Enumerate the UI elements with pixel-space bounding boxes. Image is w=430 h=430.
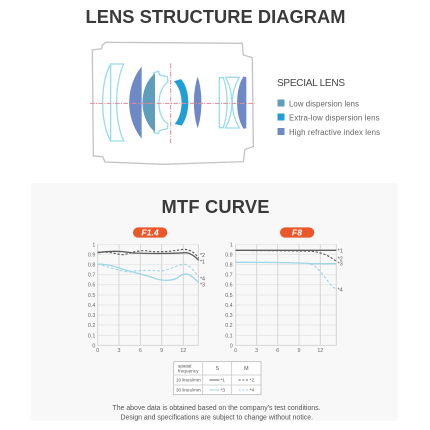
x axis labels: 0	[96, 348, 99, 354]
chart: F1.4	[88, 227, 205, 354]
y axis labels: 1	[92, 242, 95, 248]
curve labels: *3	[338, 262, 343, 268]
curve 1	[236, 248, 336, 252]
legend item: high refractive index: High refractive index lens	[289, 128, 380, 137]
x axis labels: 3	[255, 348, 258, 354]
footnote: Design and specifications are subject to change without notice.	[120, 414, 313, 422]
curve labels: *1	[200, 260, 205, 266]
y axis labels: 0.9	[88, 252, 95, 258]
y axis labels: 0.2	[88, 323, 95, 329]
optical axis	[90, 63, 255, 143]
lens diagram	[90, 42, 255, 164]
y axis labels: 0.6	[88, 283, 95, 289]
x axis labels	[234, 348, 323, 354]
table header: M	[244, 366, 249, 372]
x axis labels: 0	[234, 348, 237, 354]
y axis labels	[88, 242, 95, 349]
curve labels	[200, 253, 205, 288]
legend: special lens	[277, 78, 380, 137]
y axis labels: 0.3	[225, 313, 233, 319]
table row: 30 lines/mm: 30 lines/mm	[176, 388, 201, 393]
x axis labels: 6	[139, 348, 142, 354]
y axis labels: 0.3	[88, 313, 95, 319]
grid	[98, 244, 198, 335]
y axis labels: 0.2	[225, 323, 233, 329]
rear lens group	[219, 77, 239, 128]
table header	[178, 363, 249, 374]
legend item: extra-low dispersion: Extra-low dispersion lens	[289, 114, 380, 122]
table header: spatial	[178, 363, 191, 368]
y axis labels: 0.4	[88, 303, 95, 309]
x axis labels: 6	[276, 348, 279, 354]
badge: F1.4: F1.4	[141, 228, 159, 238]
curve 3	[236, 262, 336, 264]
y axis labels: 0.1	[225, 333, 233, 339]
y axis labels	[225, 242, 233, 349]
x axis labels: 3	[118, 348, 121, 354]
title: MTF curve: MTF CURVE	[162, 196, 270, 217]
lens barrel outline	[92, 42, 253, 164]
footnote	[112, 405, 321, 422]
curve 4	[236, 262, 336, 289]
curve 2	[98, 249, 199, 258]
y axis labels: 0.8	[225, 263, 233, 269]
x axis labels	[96, 348, 186, 354]
extra-low dispersion lens	[174, 79, 188, 126]
table row: 10 lines/mm: *1	[220, 378, 225, 384]
curve labels: *2	[200, 253, 205, 259]
table row: 10 lines/mm: *2	[250, 378, 255, 384]
x axis labels: 12	[317, 348, 323, 354]
high refractive lens 3	[237, 77, 246, 129]
y axis labels: 0	[92, 343, 95, 349]
curve labels: *4	[338, 287, 343, 293]
y axis labels: 0.1	[88, 333, 95, 339]
y axis labels: 0.5	[225, 293, 233, 299]
curve 4	[98, 264, 199, 277]
high refractive lens 1	[129, 67, 142, 139]
curve 3	[98, 264, 199, 283]
table row: 30 lines/mm	[176, 388, 255, 394]
table row: 10 lines/mm: 10 lines/mm	[176, 378, 201, 383]
y axis labels: 0.9	[225, 252, 233, 258]
front lens group	[103, 64, 124, 141]
high refractive lens 2	[194, 77, 201, 128]
doublet clear element	[154, 71, 168, 134]
curve labels: *2	[338, 257, 343, 263]
y axis labels: 0	[230, 343, 233, 349]
y axis labels: 0.8	[88, 263, 95, 269]
chart: F8	[225, 227, 343, 354]
badge: F8: F8	[292, 228, 302, 238]
y axis labels: 0.4	[225, 303, 233, 309]
footnote: The above data is obtained based on the company's test conditions.	[112, 405, 321, 412]
grid	[236, 244, 336, 335]
curve 2	[236, 250, 336, 261]
low dispersion lens	[142, 73, 155, 132]
curve labels: *1	[338, 249, 343, 255]
curve labels	[338, 249, 343, 293]
curve labels: *4	[200, 277, 205, 283]
y axis labels: 1	[230, 242, 233, 248]
y axis labels: 0.7	[88, 273, 95, 279]
table row: 10 lines/mm	[176, 378, 255, 384]
panel: MTF curve	[31, 183, 398, 421]
x axis labels: 9	[160, 348, 163, 354]
title: lens structure diagram: LENS STRUCTURE DIAGRAM	[86, 6, 346, 27]
legend table	[174, 362, 261, 395]
y axis labels: 0.6	[225, 283, 233, 289]
x axis labels: 12	[180, 348, 186, 354]
x axis labels: 9	[298, 348, 301, 354]
y axis labels: 0.5	[88, 293, 95, 299]
table header: S	[216, 366, 220, 372]
legend item: low dispersion: Low dispersion lens	[289, 100, 359, 108]
legend heading: SPECIAL LENS	[277, 78, 345, 89]
table row: 30 lines/mm: *4	[250, 388, 255, 394]
y axis labels: 0.7	[225, 273, 233, 279]
table header: frequency	[178, 369, 199, 374]
curve 1	[98, 251, 199, 260]
curve labels: *3	[200, 282, 205, 288]
table row: 30 lines/mm: *3	[220, 388, 225, 394]
